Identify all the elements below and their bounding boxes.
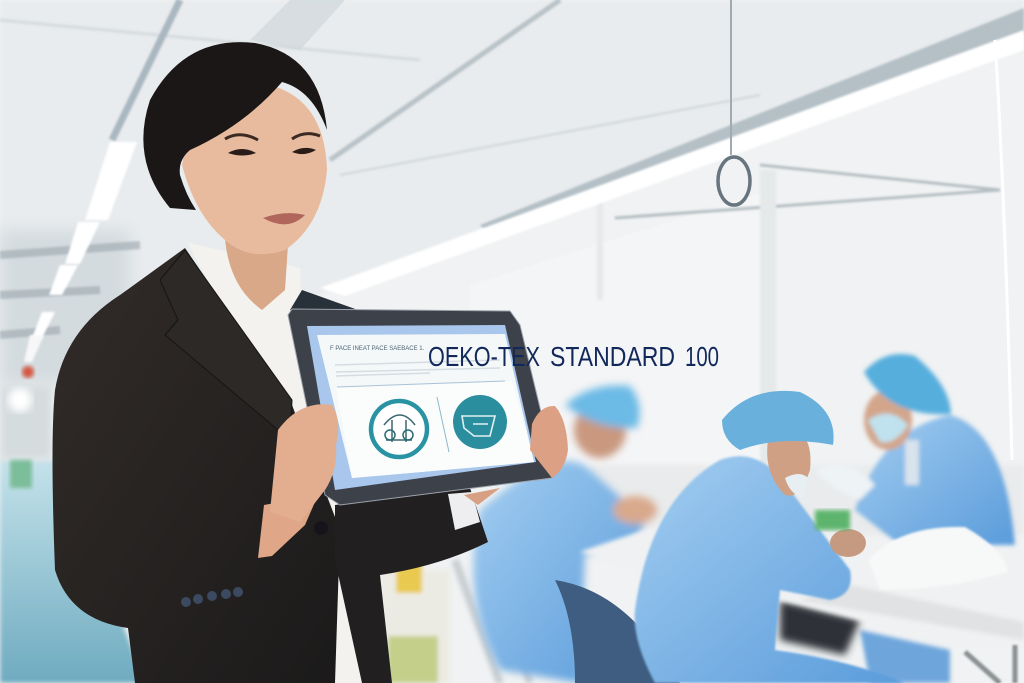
right hand	[530, 406, 568, 478]
worker: far right	[815, 354, 1015, 545]
tablet icon: left circle	[371, 401, 427, 457]
title label: OEKO-TEX	[428, 341, 540, 372]
title label: 100	[685, 341, 719, 372]
floor	[0, 385, 145, 683]
worker: foreground	[635, 391, 905, 683]
title label	[428, 341, 719, 372]
eyes, mouth	[228, 148, 316, 156]
shirt	[188, 243, 365, 683]
right sleeve	[335, 488, 488, 683]
hanging ring	[718, 0, 1012, 460]
tablet screen heading: F PACE INEAT PACE SAEBACE 1.	[330, 346, 425, 352]
face	[182, 85, 327, 254]
sleeve buttons	[181, 587, 243, 607]
left fingers over tablet	[270, 404, 338, 522]
left wrist	[258, 495, 318, 558]
woman in black blazer	[52, 42, 568, 683]
table	[580, 525, 1024, 683]
shirt cuff	[448, 492, 480, 530]
hair	[143, 42, 327, 210]
tablet	[288, 309, 555, 505]
ceiling light strips	[22, 8, 1024, 378]
tablet icon: right circle	[453, 395, 507, 449]
worker: far left	[473, 385, 657, 683]
background workers and table	[380, 354, 1024, 683]
neck	[224, 210, 290, 310]
chair	[555, 580, 680, 683]
title label: STANDARD	[550, 341, 675, 372]
blazer	[52, 248, 340, 683]
